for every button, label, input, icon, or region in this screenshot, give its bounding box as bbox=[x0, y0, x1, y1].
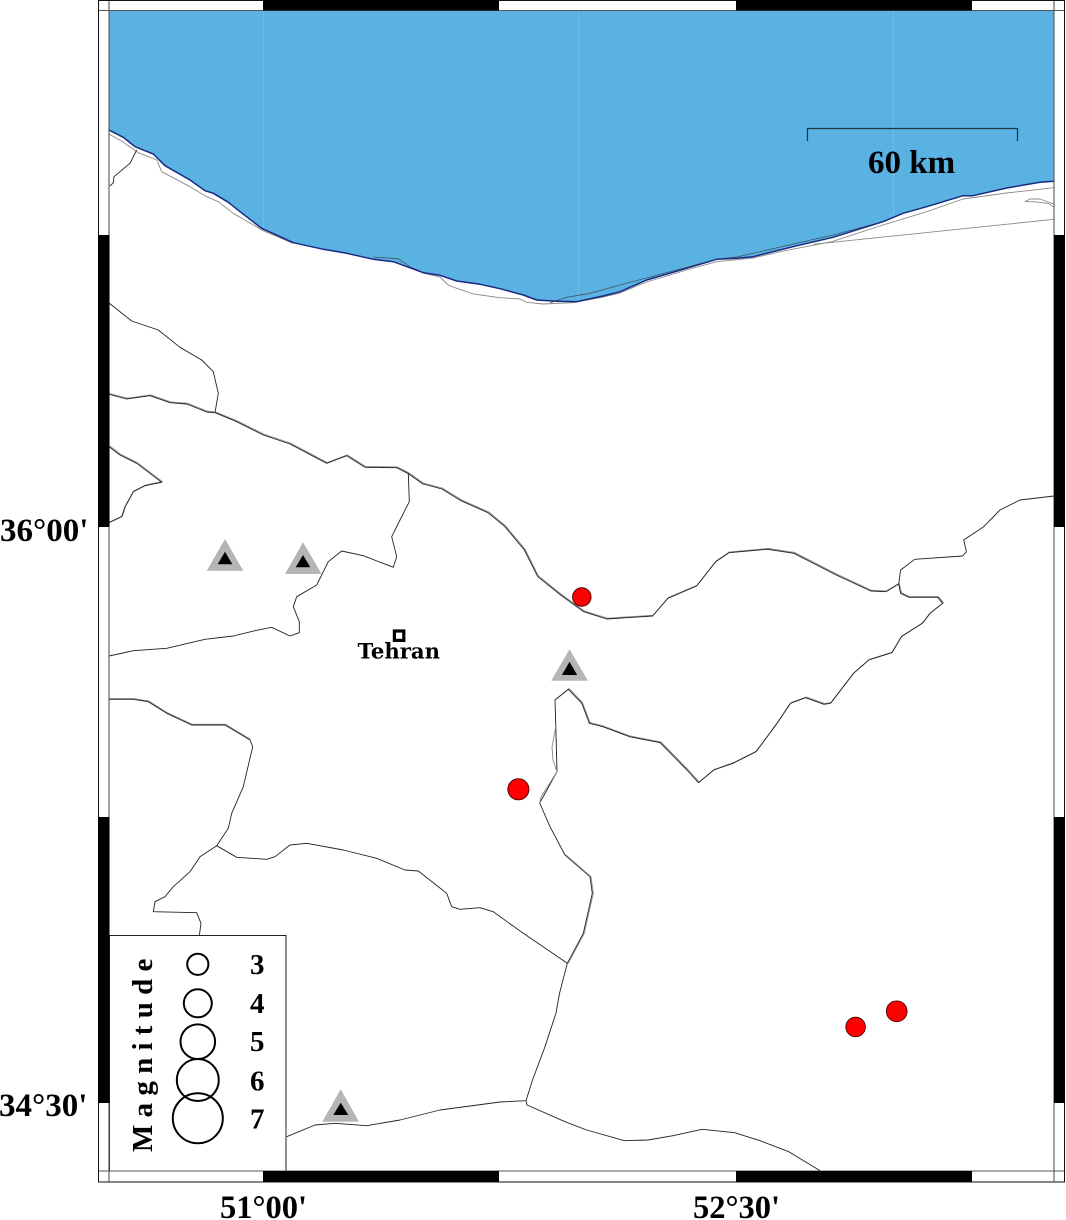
coastline bbox=[109, 130, 1054, 304]
legend circles bbox=[173, 954, 223, 1143]
water body: Caspian Sea bbox=[109, 11, 1054, 302]
scale bar: 60 km bbox=[868, 145, 955, 181]
earthquake epicentre 1 bbox=[572, 588, 591, 606]
latitude label 34: 34°30' bbox=[0, 1088, 87, 1124]
legend title: M a g n i t u d e bbox=[127, 959, 159, 1152]
station triangle 4 bbox=[322, 1089, 359, 1122]
legend numbers: 7 bbox=[250, 1104, 264, 1136]
latitude label 36: 36°00' bbox=[0, 513, 88, 549]
station triangle 3 bbox=[551, 649, 588, 681]
legend numbers: 4 bbox=[250, 988, 264, 1020]
legend: magnitude bbox=[110, 936, 286, 1171]
legend numbers: 3 bbox=[250, 949, 264, 981]
station triangle 2 bbox=[285, 542, 322, 574]
city marker: Tehran: Tehran bbox=[358, 638, 440, 663]
earthquake epicentre 4 bbox=[886, 1001, 907, 1022]
station triangle 1 bbox=[207, 539, 243, 571]
legend numbers bbox=[250, 949, 264, 1136]
earthquake epicentre 2 bbox=[508, 779, 529, 800]
earthquake epicentre 3 bbox=[846, 1017, 865, 1037]
legend numbers: 5 bbox=[250, 1026, 264, 1058]
legend numbers: 6 bbox=[250, 1066, 264, 1098]
province borders bbox=[109, 150, 1054, 1171]
scale bar bbox=[808, 128, 1018, 181]
